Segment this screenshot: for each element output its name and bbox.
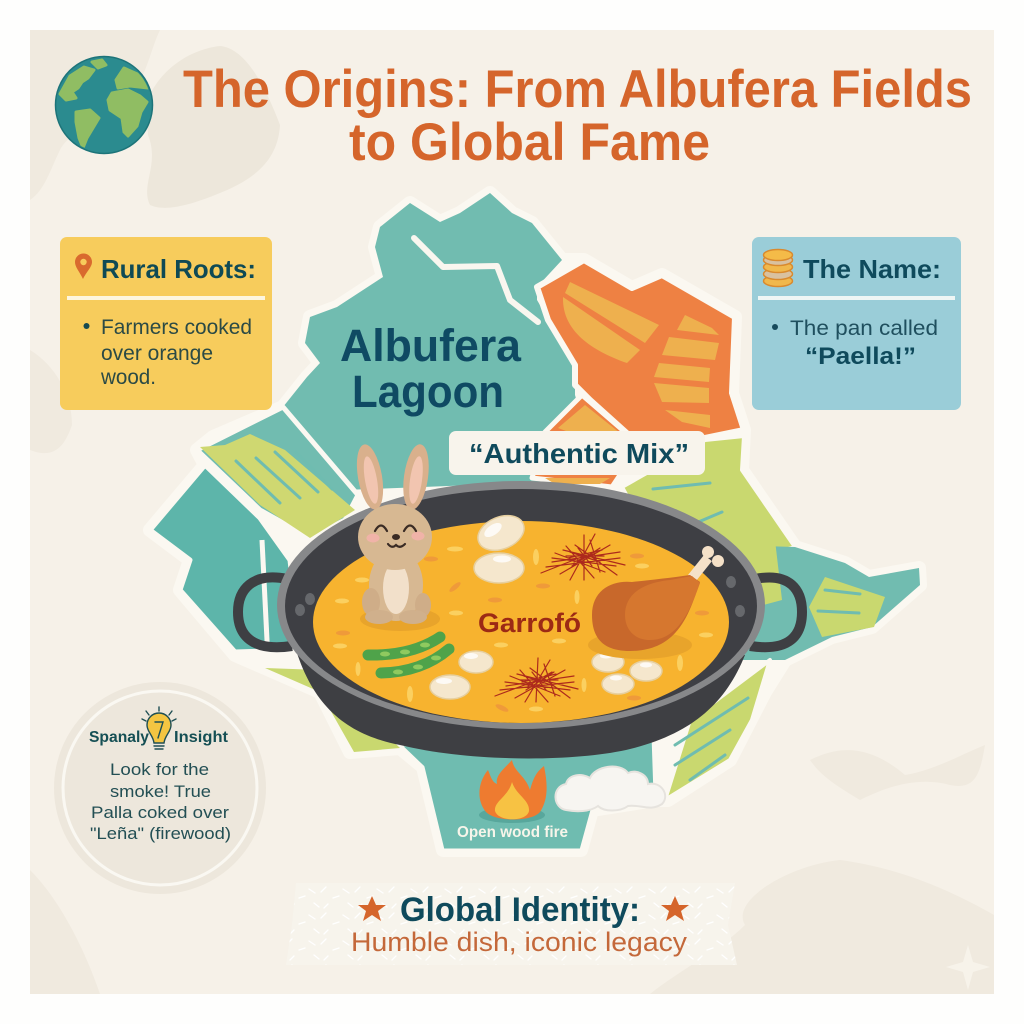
- icon: light bulb: [142, 707, 176, 749]
- label: Albufera Lagoon: Lagoon: [352, 366, 504, 417]
- orange field region: [537, 260, 744, 445]
- butter beans: [430, 509, 662, 699]
- body text: insight: Palla coked over: [91, 803, 229, 822]
- panel: Rural Roots: [60, 237, 272, 410]
- heading: Spanaly Insight: Insight: [174, 729, 229, 746]
- bean highlights: [436, 520, 652, 684]
- icon: globe: [56, 56, 152, 154]
- carrot bits: [336, 554, 709, 713]
- label: Authentic Mix: “Authentic Mix”: [469, 438, 689, 469]
- body text: insight: smoke! True: [110, 782, 211, 801]
- emphasised word: Paella: “Paella!”: [805, 343, 916, 370]
- label: Authentic Mix: [449, 431, 705, 475]
- body text: Rural Roots: Farmers cooked: [101, 316, 252, 339]
- teal region: Albufera lagoon: [283, 193, 600, 490]
- teal fire block: [400, 735, 655, 850]
- body text: insight: Look for the: [110, 760, 209, 779]
- heading: Spanaly Insight: Spanaly: [89, 729, 149, 746]
- lime patches with lines, far right: [729, 540, 885, 637]
- green beans: [368, 637, 449, 674]
- icon: map pin: [75, 254, 92, 279]
- map outline halo: [150, 193, 920, 850]
- pan body: [296, 650, 745, 758]
- teal region far right: [720, 545, 920, 660]
- lime patch lower right: [665, 660, 770, 800]
- icon: open wood fire: [479, 760, 547, 823]
- icon: smoke cloud: [555, 767, 665, 811]
- rabbit: [352, 442, 440, 631]
- panel: The Name: [752, 237, 961, 410]
- pan rim: [277, 481, 765, 729]
- lime region right: [622, 436, 795, 600]
- title: The Origins: From Albufera Fields: [183, 60, 972, 119]
- body text: insight: "Leña" (firewood): [90, 824, 231, 843]
- saffron threads top: [541, 534, 625, 580]
- body text: The Name: The pan called: [790, 317, 938, 340]
- body text: Rural Roots: over orange: [101, 342, 213, 365]
- body text: Rural Roots: wood.: [100, 366, 156, 389]
- chicken leg: [588, 546, 724, 659]
- subheading: Humble dish: Humble dish, iconic legacy: [351, 927, 688, 957]
- lime region lines: [653, 483, 722, 523]
- teal region lower left: [150, 465, 300, 652]
- pan handles: [238, 577, 802, 647]
- label: Albufera Lagoon: Albufera: [340, 320, 522, 371]
- paella pan: [238, 442, 802, 758]
- heading: Global Identity: Global Identity:: [400, 891, 640, 929]
- stars: [358, 896, 689, 921]
- lime patch lower left: [265, 668, 400, 752]
- heading: The Name: The Name:: [803, 254, 941, 284]
- banner: Global Identity: [286, 883, 737, 965]
- heading: Rural Roots: Rural Roots:: [101, 254, 256, 284]
- rice grains: [333, 546, 713, 712]
- label: Garrofó: Garrofó: [478, 608, 581, 638]
- white boundary line by handle: [262, 540, 268, 660]
- small orange field stripes: [545, 405, 625, 484]
- map of Albufera region: [150, 193, 920, 850]
- pan interior: [285, 489, 757, 723]
- rim bolts: [295, 576, 745, 617]
- icon: sparkle: [946, 945, 990, 990]
- small lower orange field: [532, 395, 640, 487]
- orange field stripes: [563, 282, 719, 428]
- callout: Spanaly Insight: [54, 682, 266, 894]
- label: Open wood fire: Open wood fire: [457, 824, 568, 841]
- rice bed: [313, 521, 729, 723]
- river line: [414, 238, 538, 322]
- title: to Global Fame: [349, 113, 710, 172]
- icon: stacked paella pans: [764, 250, 792, 286]
- lime field upper left: [197, 407, 358, 538]
- lime field patch with lines: [200, 434, 355, 538]
- saffron threads bottom: [495, 658, 578, 702]
